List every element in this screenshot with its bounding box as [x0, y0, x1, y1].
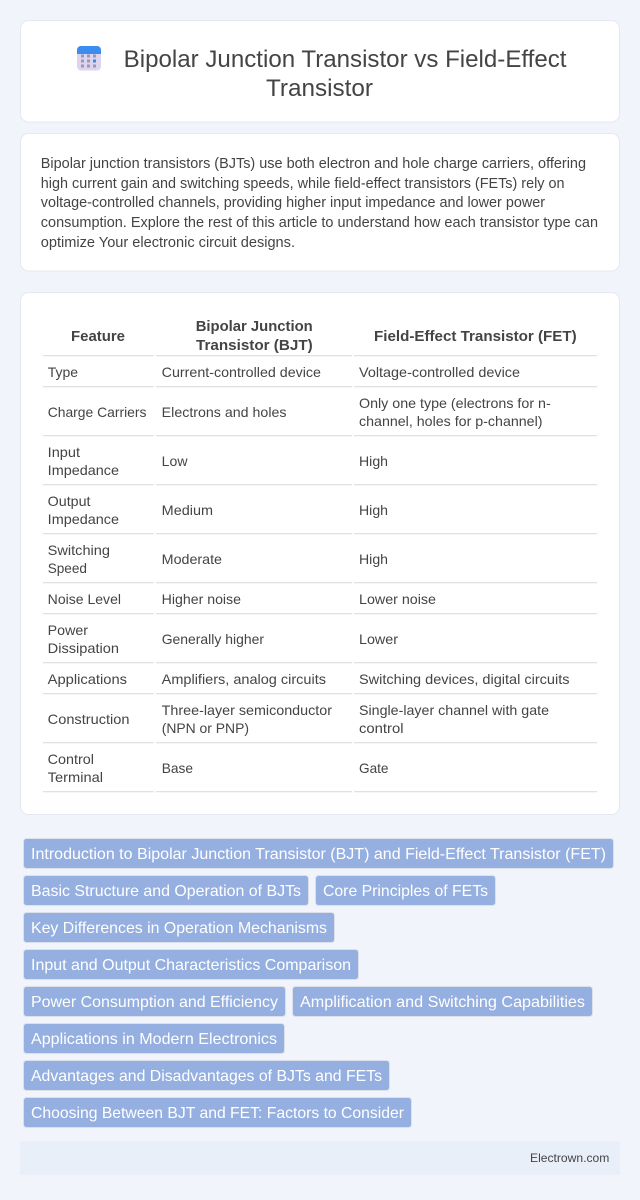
row: noise level: Noise Level [48, 591, 121, 607]
row: switching speed: Moderate [162, 551, 222, 567]
row: input impedance: High [359, 453, 388, 469]
tag: core principles: Core Principles of FETs [323, 883, 488, 900]
row: power dissipation: Dissipation [48, 640, 119, 656]
table header row: Bipolar Junction [196, 318, 313, 335]
row: power dissipation: Power [48, 622, 88, 638]
tag: key differences: Key Differences in Operation Mechanisms [31, 920, 327, 937]
row: control terminal [43, 751, 597, 792]
panel: intro paragraph: Bipolar junction transistors (BJTs) use both electron and hole charge carriers, offering [41, 156, 586, 172]
row: power dissipation: Generally higher [162, 631, 264, 647]
row: output impedance: Output [48, 493, 91, 509]
panel: intro paragraph: high current gain and switching speeds, while field-effect transistors (FETs) rely on [41, 176, 565, 192]
row: applications [43, 671, 597, 694]
tag: core principles [316, 876, 496, 906]
row: switching speed [43, 542, 597, 583]
title [124, 46, 567, 102]
tag: advantages [24, 1060, 390, 1090]
row: control terminal: Terminal [48, 769, 103, 785]
row: control terminal: Control [48, 751, 94, 767]
tag: input and output [24, 950, 358, 980]
row: output impedance: Medium [162, 502, 213, 518]
row: type: Current-controlled device [162, 364, 321, 380]
row: switching speed: Switching [48, 542, 110, 558]
panel: intro paragraph: voltage-controlled channels, providing higher input impedance and lower power [41, 195, 545, 211]
tag: introduction: Introduction to Bipolar Junction Transistor (BJT) and Field-Effect Transistor (FET) [31, 846, 606, 863]
tag: applications [24, 1024, 284, 1054]
row: charge carriers: channel, holes for p-channel) [359, 413, 542, 429]
footer: Electrown.com [530, 1151, 609, 1165]
row: type [43, 364, 597, 387]
tag: choosing [24, 1098, 412, 1128]
row: output impedance: Impedance [48, 511, 119, 527]
row: output impedance [43, 493, 597, 534]
tag: introduction [24, 838, 614, 868]
row: noise level: Higher noise [162, 591, 241, 607]
tag: input and output: Input and Output Characteristics Comparison [31, 957, 351, 974]
panel: title card [20, 20, 620, 122]
row: charge carriers: Only one type (electrons for n- [359, 395, 551, 411]
row: power dissipation: Lower [359, 631, 398, 647]
title: Bipolar Junction Transistor vs Field-Effect [124, 46, 567, 73]
table header row: Field-Effect Transistor (FET) [374, 328, 577, 345]
row: construction: (NPN or PNP) [162, 720, 249, 736]
row: noise level [43, 591, 597, 614]
table header row [43, 318, 597, 356]
table header row: Feature [71, 328, 125, 345]
row: switching speed: High [359, 551, 388, 567]
tag: amplification: Amplification and Switching Capabilities [300, 994, 585, 1011]
row: input impedance: Low [162, 453, 188, 469]
row: input impedance: Input [48, 444, 80, 460]
tag: applications: Applications in Modern Electronics [31, 1031, 277, 1048]
row: input impedance: Impedance [48, 462, 119, 478]
row: control terminal: Gate [359, 760, 389, 776]
tag: basic structure: Basic Structure and Operation of BJTs [31, 883, 301, 900]
row: construction: Three-layer semiconductor [162, 702, 332, 718]
row: input impedance [43, 444, 597, 485]
tag: choosing: Choosing Between BJT and FET: Factors to Consider [31, 1105, 405, 1122]
row: type: Type [48, 364, 78, 380]
row: applications: Switching devices, digital circuits [359, 671, 570, 687]
tag: key differences [24, 912, 334, 942]
tag: power consumption: Power Consumption and Efficiency [31, 994, 278, 1011]
footer [20, 1141, 620, 1175]
row: construction: Construction [48, 711, 130, 727]
panel: intro paragraph: optimize Your electronic circuit designs. [41, 235, 295, 251]
icon: calendar grid [77, 46, 101, 70]
tag: basic structure [24, 876, 308, 906]
row: construction [43, 702, 597, 743]
row: type: Voltage-controlled device [359, 364, 520, 380]
table header row: Transistor (BJT) [196, 337, 313, 354]
row: charge carriers: Electrons and holes [162, 404, 286, 420]
tag: power consumption [24, 986, 286, 1016]
row: charge carriers [43, 395, 597, 436]
panel: topic tags [24, 838, 614, 1128]
row: output impedance: High [359, 502, 388, 518]
title: Transistor [266, 75, 373, 102]
row: construction: Single-layer channel with gate [359, 702, 549, 718]
panel: comparison table [20, 292, 620, 814]
row: applications: Applications [48, 671, 127, 687]
row: applications: Amplifiers, analog circuits [162, 671, 326, 687]
row: control terminal: Base [162, 760, 193, 776]
panel: intro paragraph [20, 134, 620, 271]
row: noise level: Lower noise [359, 591, 436, 607]
panel: intro paragraph: consumption. Explore the rest of this article to understand how each transistor type can [41, 215, 598, 231]
row: charge carriers: Charge Carriers [48, 404, 147, 420]
row: power dissipation [43, 622, 597, 663]
tag: advantages: Advantages and Disadvantages of BJTs and FETs [31, 1068, 382, 1085]
row: switching speed: Speed [48, 560, 87, 576]
tag: amplification [292, 986, 592, 1016]
row: construction: control [359, 720, 404, 736]
